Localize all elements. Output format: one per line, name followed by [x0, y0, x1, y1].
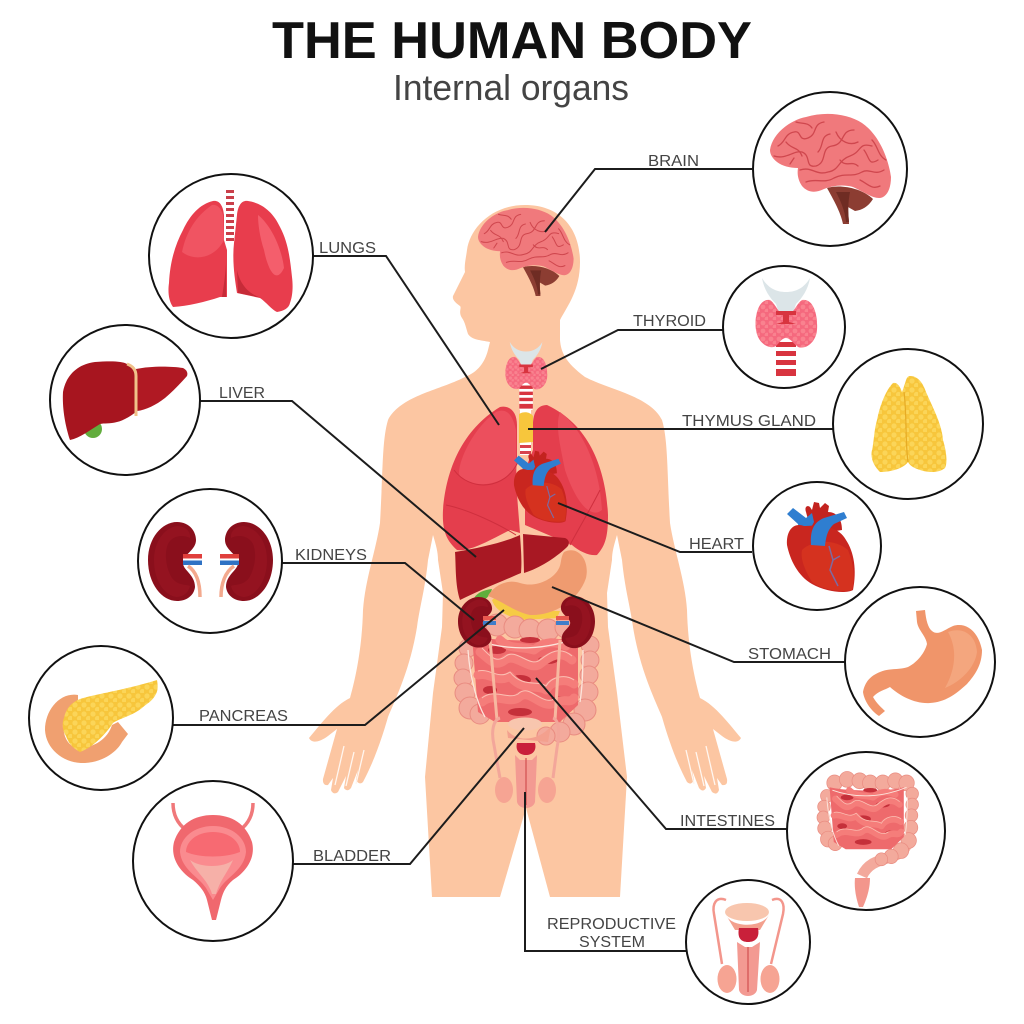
panel: kidneys: [138, 489, 282, 633]
label: lungs: LUNGS: [319, 240, 376, 257]
organ: intestines in body: [454, 614, 599, 745]
human body silhouette: [309, 205, 741, 897]
panel: pancreas: [29, 646, 173, 790]
label: intestines: INTESTINES: [680, 813, 775, 830]
organ: lower trachea: [520, 385, 531, 455]
organ: gallbladder: [474, 589, 492, 602]
title: THE HUMAN BODY: [272, 12, 752, 70]
panel: bladder: [133, 781, 293, 941]
label: reproductive system: [547, 916, 676, 951]
panel: reproductive system: [686, 880, 810, 1004]
label: pancreas: PANCREAS: [199, 708, 288, 725]
panel: stomach: [845, 587, 995, 737]
label: stomach: STOMACH: [748, 646, 831, 663]
organ: lungs in body: [443, 405, 608, 555]
organ: thymus in body: [519, 412, 533, 443]
organ: brain in body: [478, 208, 574, 296]
organ: pancreas in body: [492, 592, 560, 620]
label: liver: LIVER: [219, 385, 265, 402]
panel: thymus gland: [833, 349, 983, 499]
organ: stomach in body: [488, 550, 587, 615]
label: thymus gland: THYMUS GLAND: [682, 413, 816, 430]
label: reproductive system: SYSTEM: [579, 934, 645, 951]
panel: intestines: [787, 752, 945, 910]
organ: kidneys in body: [458, 596, 595, 648]
panel: brain: [753, 92, 907, 246]
organ: liver in body: [455, 534, 569, 600]
label: brain: BRAIN: [648, 153, 699, 170]
label: reproductive system: REPRODUCTIVE: [547, 916, 676, 933]
organ: reproductive system in body: [493, 718, 559, 808]
label: bladder: BLADDER: [313, 848, 391, 865]
subtitle: Internal organs: [393, 67, 629, 108]
label: thyroid: THYROID: [633, 313, 706, 330]
panel: lungs: [149, 174, 313, 338]
panel: thyroid: [723, 266, 845, 388]
panel: liver: [50, 325, 200, 475]
organ: heart in body: [514, 451, 567, 523]
label: kidneys: KIDNEYS: [295, 547, 367, 564]
panel: heart: [753, 482, 881, 610]
organ: ureters: [490, 640, 560, 720]
finger gaps: [335, 746, 715, 786]
leader lines: [173, 169, 846, 951]
organ: thyroid in body: [505, 342, 547, 410]
label: heart: HEART: [689, 536, 745, 553]
